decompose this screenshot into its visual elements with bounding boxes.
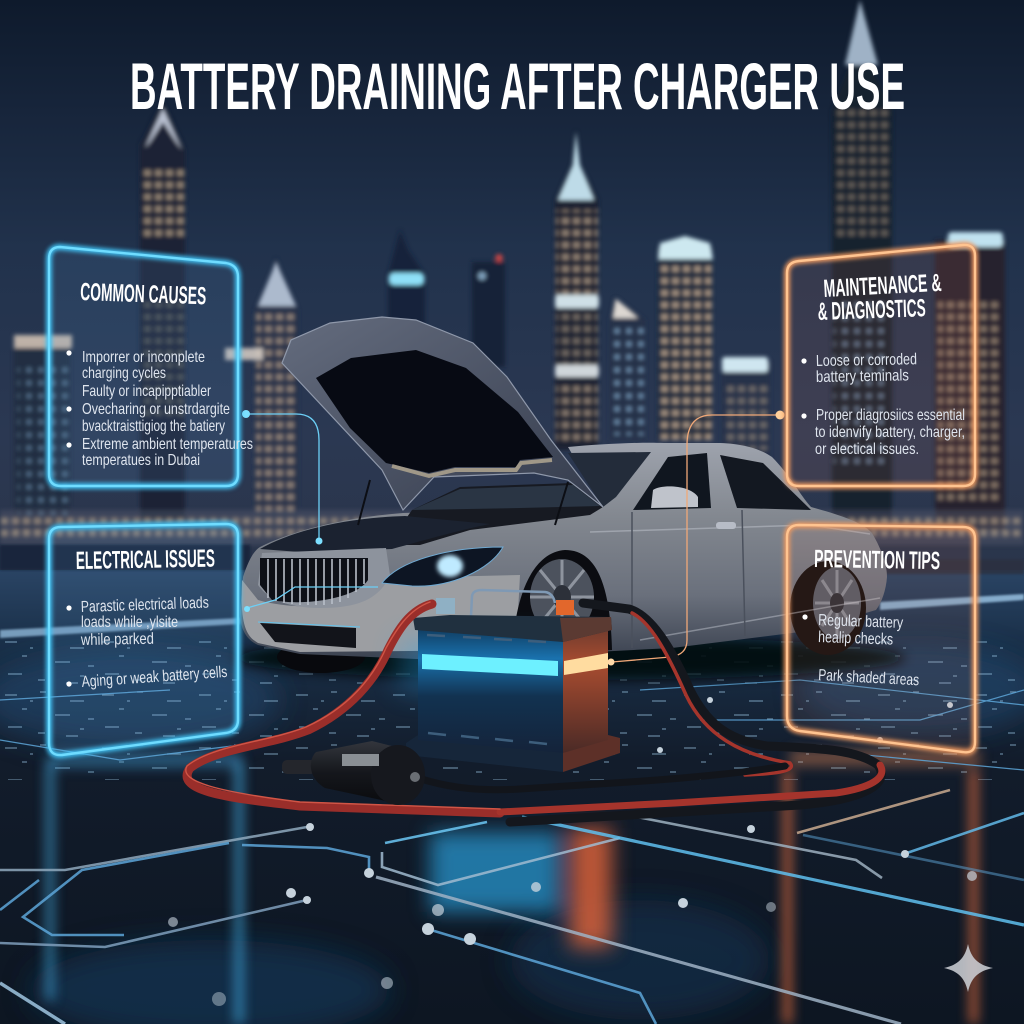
- plug: nozzle: [282, 760, 316, 774]
- panel frame: orange glow: [787, 245, 975, 486]
- list: maintenance: Loose or corroded: [816, 351, 917, 370]
- connector: blue line from common causes to car: [242, 410, 322, 544]
- floor: large battery reflections: [430, 828, 612, 948]
- list: electrical issues: loads while ,ylsite: [81, 614, 178, 631]
- car: front grille surround: [258, 548, 390, 608]
- floor: broad blue tint: [0, 645, 1024, 1024]
- list: electrical issues: Aging or weak battery cells: [81, 664, 228, 691]
- cable: red lead on right: [500, 765, 882, 812]
- car: engine bay: [330, 483, 603, 545]
- panel frame: orange glow: [787, 525, 975, 752]
- list: common causes: temperatues in Dubai: [82, 452, 200, 469]
- charger plug: [282, 741, 425, 805]
- battery: base front: [406, 735, 563, 772]
- list: common causes: [82, 349, 253, 469]
- background: night sky: [0, 0, 1024, 620]
- cable: black lead on right: [510, 603, 881, 822]
- list: electrical issues: Parastic electrical loads: [81, 595, 209, 616]
- list: common causes: Imporrer or inconplete: [82, 349, 205, 366]
- list: maintenance: to idenvify battery, charger,: [815, 424, 965, 441]
- panel frame: blue glow: [49, 524, 238, 755]
- list: prevention: [818, 612, 920, 689]
- car: side crease: [590, 525, 880, 640]
- list: prevention: Park shaded areas: [818, 667, 920, 689]
- floor: narrow panel reflections: [47, 750, 980, 1024]
- list: common causes: charging cycles: [82, 365, 166, 382]
- floor: horizon glow lines: [0, 545, 1024, 638]
- panel frame: orange line: [787, 525, 975, 752]
- bullets: electrical issues: [66, 605, 72, 687]
- panel: maintenance and diagnostics: [787, 245, 975, 486]
- bullets: maintenance: [801, 358, 807, 419]
- battery: [400, 590, 620, 772]
- battery: lid vents: [427, 635, 547, 744]
- bullets: common causes: [66, 350, 72, 448]
- floor: circuit traces and nodes: [0, 680, 1024, 1024]
- list: maintenance: [815, 351, 965, 458]
- heading: electrical issues: ELECTRICAL ISSUES: [76, 545, 215, 575]
- panel: prevention tips: [787, 525, 975, 752]
- car: bright front bumper: [242, 575, 520, 652]
- car: headlight: [382, 547, 503, 586]
- battery: negative terminal: [556, 600, 574, 615]
- list: electrical issues: [80, 595, 228, 691]
- floor: wet circuit ground: [0, 570, 1024, 1024]
- heading: maintenance and diagnostics: [817, 269, 942, 326]
- cables: charger leads: [186, 602, 882, 822]
- car: front lower wheel: [277, 641, 365, 673]
- plug: cylinder body: [311, 741, 425, 804]
- car: underhood panel: [282, 317, 603, 510]
- heading: common causes: COMMON CAUSES: [80, 278, 207, 310]
- car: door shut lines: [632, 510, 745, 648]
- car: side mirror: [651, 486, 698, 508]
- panel frame: orange line: [787, 245, 975, 486]
- car: windshield under hood: [412, 485, 600, 510]
- list: common causes: bvacktraisttigiog the batiery: [82, 418, 225, 435]
- panel frame: blue line: [49, 524, 238, 755]
- panel: common causes: [49, 247, 253, 486]
- battery: positive terminal: [436, 598, 455, 614]
- car: windshield: [568, 452, 651, 507]
- car: front side window: [633, 453, 711, 510]
- car: rear side window: [720, 455, 811, 510]
- connector: blue trace from electrical issues to grille: [244, 587, 378, 612]
- cable: black lead from charger: [418, 766, 785, 790]
- car: door handle: [716, 522, 736, 529]
- cable: red core on right: [632, 613, 791, 775]
- list: common causes: Extreme ambient temperatures: [82, 436, 253, 453]
- car: hood strut lines: [358, 480, 568, 525]
- car: ground shadow: [235, 636, 905, 680]
- battery: orange charge band: [564, 653, 608, 675]
- plug: end cap: [371, 745, 425, 805]
- heading: maintenance and diagnostics: & DIAGNOSTICS: [817, 294, 926, 326]
- battery: blue charge band: [422, 654, 558, 676]
- car: wheel arch and front wheel: [512, 550, 612, 655]
- cable: red highlight: [186, 602, 500, 809]
- list: prevention: healip checks: [818, 629, 893, 649]
- car: hood front top: [260, 516, 490, 552]
- connector: orange line from maintenance panel to battery: [608, 410, 784, 666]
- battery: front face: [418, 627, 563, 753]
- battery: side face: [563, 625, 608, 753]
- list: electrical issues: while parked: [80, 631, 154, 649]
- list: maintenance: battery teminals: [816, 367, 909, 386]
- car: rear wheel: [790, 561, 866, 655]
- panel frame: blue glow: [49, 247, 238, 486]
- car: lower front intake: [260, 623, 356, 648]
- list: prevention: Regular battery: [818, 612, 903, 632]
- bullet: prevention: [802, 614, 808, 620]
- icon: four-point sparkle: [944, 944, 993, 992]
- plug: label: [342, 754, 379, 766]
- cable: red lead on left: [187, 604, 500, 813]
- background: blurred city skyline: [0, 0, 1024, 545]
- battery: blue glow: [400, 640, 570, 690]
- floor: speckled lights: [0, 640, 1024, 780]
- car: hood dark interior: [316, 350, 553, 473]
- panel: electrical issues: [49, 524, 238, 755]
- battery: base side: [563, 735, 620, 772]
- list: maintenance: or electical issues.: [815, 441, 919, 458]
- car: bumper blue trim: [258, 622, 360, 627]
- list: common causes: Ovecharing or unstrdargite: [82, 401, 230, 418]
- battery: lid side: [560, 617, 612, 642]
- car: front grille bars: [260, 558, 368, 605]
- panel frame: blue line: [49, 247, 238, 486]
- battery: handle: [471, 590, 555, 616]
- plug: strain relief: [410, 772, 420, 782]
- battery: top lid: [413, 615, 612, 642]
- list: maintenance: Proper diagrosiics essential: [816, 407, 965, 424]
- car: body shell: [240, 443, 887, 660]
- list: common causes: Faulty or incapipptiabler: [82, 383, 212, 400]
- car: silver sedan with open hood: [235, 317, 905, 680]
- car: hood lit lip: [392, 460, 552, 476]
